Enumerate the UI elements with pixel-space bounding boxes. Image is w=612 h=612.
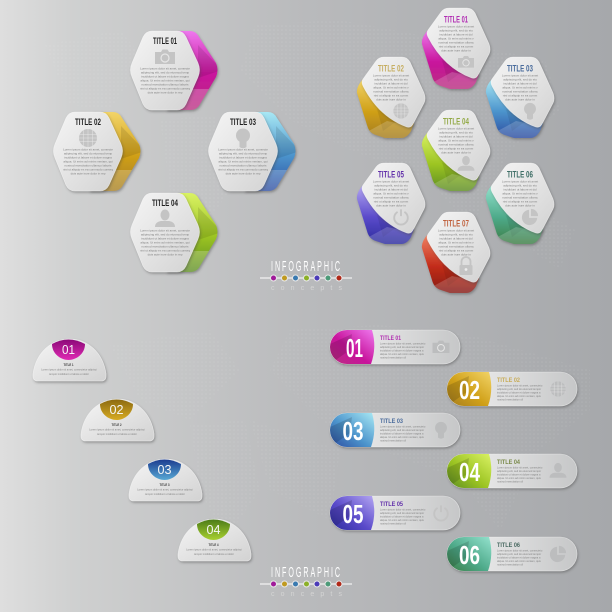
pill 04 [447,454,577,488]
body text: aliqua. Ut enim ad minim v [438,240,474,244]
logo subheading: concepts [271,591,342,598]
body text: adipiscing elit, sed do eiusmod temp [219,152,268,156]
colour band [486,185,543,244]
band facets [370,109,412,138]
body text: aliqua. Ut enim ad minim veniam, qui [140,240,190,244]
body text: nostrud exercitation ullamc [502,196,538,200]
title: TITLE 01 [444,14,468,26]
dotted timeline [260,581,352,587]
pill title: TITLE 06 [497,542,520,549]
pill text: adipiscing elit, sed do eiusmod tempor [497,387,541,391]
pill 03 [330,413,460,447]
icon: light bulb [236,128,250,148]
body text: aliqua. Ut enim ad minim v [502,192,538,196]
title: TITLE 04 [443,116,469,128]
pill body [447,537,577,571]
hexagon B title 04 [422,110,490,194]
body text: adipiscing elit, sed do eiu [439,130,473,134]
pill text: incididunt ut labore et dolore magna a [380,348,424,352]
hexagon B title 01 [422,8,490,92]
body text: nostrud exercitation ullamc [438,244,474,248]
body text: duis aute irure dolor in [376,204,406,208]
card text: tempor incididunt ut labore et dolor [194,552,234,556]
body text: incididunt ut labore et dol [503,82,537,86]
dotted world map: top [45,20,575,270]
pill text: Lorem ipsum dolor sit amet, consectetu [497,466,543,470]
body text: adipiscing elit, sed do eiu [374,78,408,82]
pill text: adipiscing elit, sed do eiusmod tempor [380,428,424,432]
band facets [434,162,478,191]
pill text: aliqua. Ut enim ad minim veniam, quis [497,559,542,563]
pill body [447,372,577,406]
body text: duis aute irure dolor in rep [71,172,106,176]
semicircle cards [33,339,251,561]
band facets [434,60,478,89]
colour band [244,112,296,191]
body text: incididunt ut labore et dolore magna [219,156,267,160]
pill text: adipiscing elit, sed do eiusmod tempor [380,345,424,349]
colour cap [447,537,491,571]
icon: light bulb [435,422,447,439]
number: 01 [346,333,363,363]
body text: incididunt ut labore et dolore magna [141,236,189,240]
title: TITLE 01 [153,36,177,47]
pill text: incididunt ut labore et dolore magna a [497,390,541,394]
pill 05 [330,496,460,530]
body text: nisi ut aliquip ex ea comm [503,94,538,98]
pill 06 [447,537,577,571]
pill text: aliqua. Ut enim ad minim veniam, quis [380,518,425,522]
title: TITLE 03 [230,117,256,128]
body text: nisi ut aliquip ex ea commodo conseq [218,168,268,172]
body text: incididunt ut labore et dol [439,32,473,36]
body text: nisi ut aliquip ex ea comm [439,248,474,252]
body text: nostrud exercitation ullamco laboris [141,82,189,86]
pill text: Lorem ipsum dolor sit amet, consectetu [380,424,426,428]
icon: light bulb [524,103,536,120]
colour band [422,132,479,191]
colour cap [197,520,230,540]
pill body [330,413,460,447]
icon: pie chart [522,209,538,225]
icon: camera [155,50,175,64]
body text: incididunt ut labore et dolore magna [64,156,112,160]
icon: camera [432,341,450,353]
body text: duis aute irure dolor in rep [226,172,261,176]
hexagon B title 06 [486,163,554,247]
body text: aliqua. Ut enim ad minim veniam, qui [140,78,190,82]
hexagon B title 07 [422,212,490,296]
band facets [370,216,412,244]
pill title: TITLE 05 [380,501,403,508]
body text: duis aute irure dolor in [441,252,471,256]
logo: infographic concepts bottom: INFOGRAPHIC [271,565,342,581]
hexagon A title 03 [208,112,303,196]
pill text: incididunt ut labore et dolore magna a [380,514,424,518]
dotted timeline [260,275,352,281]
body text: aliqua. Ut enim ad minim v [373,86,409,90]
pill text: nostrud exercitation ull [497,562,523,566]
pill text: nostrud exercitation ull [497,398,523,402]
pill text: incididunt ut labore et dolore magna a [380,432,424,436]
hexagon A title 04 [130,193,225,277]
body text: adipiscing elit, sed do eiu [439,28,473,32]
icon: globe [79,129,97,147]
cap facets [447,376,469,402]
icon: person [550,463,566,478]
pill text: Lorem ipsum dolor sit amet, consectetu [380,508,426,512]
white hexagon [54,112,122,191]
logo: infographic concepts top: INFOGRAPHIC [271,259,342,275]
cap facets [330,417,352,442]
pill body [447,454,577,488]
body text: duis aute irure dolor in [505,204,535,208]
body text: adipiscing elit, sed do eiusmod temp [64,152,113,156]
card title: TITLE 1 [64,363,74,367]
colour band [422,234,479,293]
card text: tempor incididunt ut labore et dolor [97,432,137,436]
pill text: adipiscing elit, sed do eiusmod tempor [497,552,541,556]
band facets [257,126,296,191]
body text: adipiscing elit, sed do eiu [503,184,537,188]
pill body [330,330,460,364]
title: TITLE 05 [378,170,404,180]
card shape [33,339,106,381]
icon: power [394,209,408,225]
colour cap [447,372,491,406]
icon: pie chart [550,546,566,562]
body text: aliqua. Ut enim ad minim v [438,36,474,40]
colour cap [330,413,374,447]
card text: Lorem ipsum dolor sit amet, consectetur adipisci [186,548,242,552]
pill title: TITLE 04 [497,459,520,466]
body text: duis aute irure dolor in [376,98,406,102]
colour cap [52,340,85,360]
semicircle card 03 [129,459,202,501]
cap facets [447,541,469,566]
band facets [498,216,542,244]
white hexagon [427,110,490,180]
pill text: aliqua. Ut enim ad minim veniam, quis [497,394,542,398]
white hexagon [362,163,425,233]
number: 06 [459,540,480,570]
card shape [129,459,202,501]
icon: person [155,210,175,227]
number: 03 [158,463,172,477]
icon: camera [458,56,474,68]
title: TITLE 04 [152,198,178,209]
body text: nostrud exercitation ullamco laboris [219,164,267,168]
colour band [486,79,543,138]
icon: power [434,505,448,521]
body text: nisi ut aliquip ex ea comm [374,94,409,98]
semicircle card 01 [33,339,106,381]
colour cap [447,454,491,488]
number: 01 [62,343,75,357]
body text: adipiscing elit, sed do eiu [374,184,408,188]
pill text: adipiscing elit, sed do eiusmod tempor [380,511,424,515]
body text: adipiscing elit, sed do eiu [503,78,537,82]
pill text: nostrud exercitation ull [380,356,406,360]
card text: tempor incididunt ut labore et dolor [49,372,89,376]
white hexagon [427,212,490,282]
body text: adipiscing elit, sed do eiusmod temp [141,232,190,236]
body text: Lorem ipsum dolor sit amet [438,228,474,232]
body text: nisi ut aliquip ex ea comm [439,146,474,150]
body text: nisi ut aliquip ex ea commodo conseq [140,248,190,252]
card title: TITLE 2 [112,423,122,427]
band facets [434,264,478,293]
body text: incididunt ut labore et dol [439,134,473,138]
body text: Lorem ipsum dolor sit amet [502,74,538,78]
colour band [89,112,140,191]
pill text: aliqua. Ut enim ad minim veniam, quis [497,476,542,480]
pill body [330,496,460,530]
hexagon B title 02 [357,57,425,141]
body text: incididunt ut labore et dolore magna [141,74,189,78]
number: 03 [342,416,364,446]
cap facets [330,334,352,360]
colour band [422,30,479,89]
white hexagon [491,57,554,127]
card shape [81,399,154,441]
body text: nostrud exercitation ullamc [438,40,474,44]
icon: lock [460,257,472,275]
body text: duis aute irure dolor in [505,98,535,102]
semicircle card 02 [81,399,154,441]
semicircle card 04 [178,519,251,561]
title: TITLE 02 [75,117,101,128]
number: 02 [110,403,124,417]
logo subheading: concepts [271,285,342,292]
body text: incididunt ut labore et dol [374,188,408,192]
card title: TITLE 3 [160,483,170,487]
colour cap [100,400,133,420]
cap facets [447,458,469,484]
body text: incididunt ut labore et dol [439,236,473,240]
body text: Lorem ipsum dolor sit amet [438,126,474,130]
card text: Lorem ipsum dolor sit amet, consectetur adipisci [137,488,193,492]
number: 02 [459,375,480,405]
title: TITLE 06 [507,170,533,180]
card shape [178,519,251,561]
hexagon set A: four hexagons [54,31,303,277]
title: TITLE 03 [507,64,533,74]
pill text: incididunt ut labore et dolore magna a [497,472,541,476]
pill title: TITLE 03 [380,418,403,425]
logo: infographic concepts top [260,259,352,292]
white hexagon [362,57,425,127]
band facets [179,45,218,110]
body text: Lorem ipsum dolor sit amet [373,180,409,184]
body text: aliqua. Ut enim ad minim v [373,192,409,196]
body text: nisi ut aliquip ex ea comm [439,44,474,48]
body text: incididunt ut labore et dol [374,82,408,86]
body text: duis aute irure dolor in rep [148,90,183,94]
body text: nostrud exercitation ullamc [438,142,474,146]
white hexagon [130,193,200,272]
body text: Lorem ipsum dolor sit amet, consecte [218,148,268,152]
body text: duis aute irure dolor in rep [148,252,183,256]
icon: globe [393,103,409,119]
pill title: TITLE 02 [497,377,520,384]
body text: aliqua. Ut enim ad minim v [438,138,474,142]
colour band [166,31,218,110]
white hexagon [427,8,490,78]
card title: TITLE 4 [208,543,218,547]
colour band [166,193,218,272]
icon: globe [550,381,566,397]
body text: aliqua. Ut enim ad minim veniam, qui [63,160,113,164]
hexagon B title 03 [486,57,554,141]
icon: person [458,156,474,171]
number: 04 [206,523,221,537]
body text: nisi ut aliquip ex ea commodo conseq [63,168,113,172]
pill list [330,330,577,571]
pill text: Lorem ipsum dolor sit amet, consectetu [497,384,543,388]
title: TITLE 02 [378,64,404,74]
pill text: Lorem ipsum dolor sit amet, consectetu [497,548,543,552]
body text: nostrud exercitation ullamc [502,90,538,94]
pill title: TITLE 01 [380,335,401,342]
white hexagon [208,112,278,191]
pill 02 [447,372,577,406]
pill text: adipiscing elit, sed do eiusmod tempor [497,469,541,473]
hexagon A title 02 [54,112,148,196]
pill 01 [330,330,460,364]
body text: nostrud exercitation ullamco laboris [64,164,112,168]
body text: duis aute irure dolor in [441,150,471,154]
white hexagon [491,163,554,233]
band facets [102,126,140,191]
card text: tempor incididunt ut labore et dolor [145,492,185,496]
hexagon B title 05 [357,163,425,247]
pill text: aliqua. Ut enim ad minim veniam, quis [380,352,425,356]
body text: adipiscing elit, sed do eiu [439,232,473,236]
body text: Lorem ipsum dolor sit amet, consecte [63,148,113,152]
title: TITLE 07 [443,218,469,230]
hexagon set B: seven hexagons [357,8,554,296]
body text: Lorem ipsum dolor sit amet [502,180,538,184]
pill text: Lorem ipsum dolor sit amet, consectetu [380,342,426,346]
cap facets [330,500,352,526]
number: 05 [342,499,364,529]
pill text: incididunt ut labore et dolore magna a [497,556,541,560]
number: 04 [459,457,480,487]
body text: nostrud exercitation ullamc [373,196,409,200]
body text: incididunt ut labore et dol [503,188,537,192]
colour cap [330,496,374,530]
colour band [357,185,414,244]
body text: nisi ut aliquip ex ea comm [503,200,538,204]
colour band [357,79,414,138]
colour cap [148,460,181,480]
body text: nostrud exercitation ullamco laboris [141,244,189,248]
body text: Lorem ipsum dolor sit amet, consecte [140,66,190,70]
body text: aliqua. Ut enim ad minim veniam, qui [218,160,268,164]
dotted world map: bottom [110,325,590,540]
pill text: aliqua. Ut enim ad minim veniam, quis [380,435,425,439]
pill text: nostrud exercitation ull [380,438,406,442]
card text: Lorem ipsum dolor sit amet, consectetur adipisci [41,368,97,372]
hexagon A title 01 [130,31,225,115]
body text: Lorem ipsum dolor sit amet [438,24,474,28]
band facets [179,207,218,272]
logo: infographic concepts bottom [260,565,352,598]
body text: nisi ut aliquip ex ea commodo conseq [140,86,190,90]
body text: aliqua. Ut enim ad minim v [502,86,538,90]
colour cap [330,330,374,364]
body text: duis aute irure dolor in [441,48,471,52]
body text: Lorem ipsum dolor sit amet [373,74,409,78]
body text: nisi ut aliquip ex ea comm [374,200,409,204]
body text: adipiscing elit, sed do eiusmod temp [141,70,190,74]
body text: nostrud exercitation ullamc [373,90,409,94]
white hexagon [130,31,200,110]
card text: Lorem ipsum dolor sit amet, consectetur adipisci [89,428,145,432]
pill text: nostrud exercitation ull [380,522,406,526]
pill text: nostrud exercitation ull [497,480,523,484]
band facets [498,109,542,138]
body text: Lorem ipsum dolor sit amet, consecte [140,228,190,232]
